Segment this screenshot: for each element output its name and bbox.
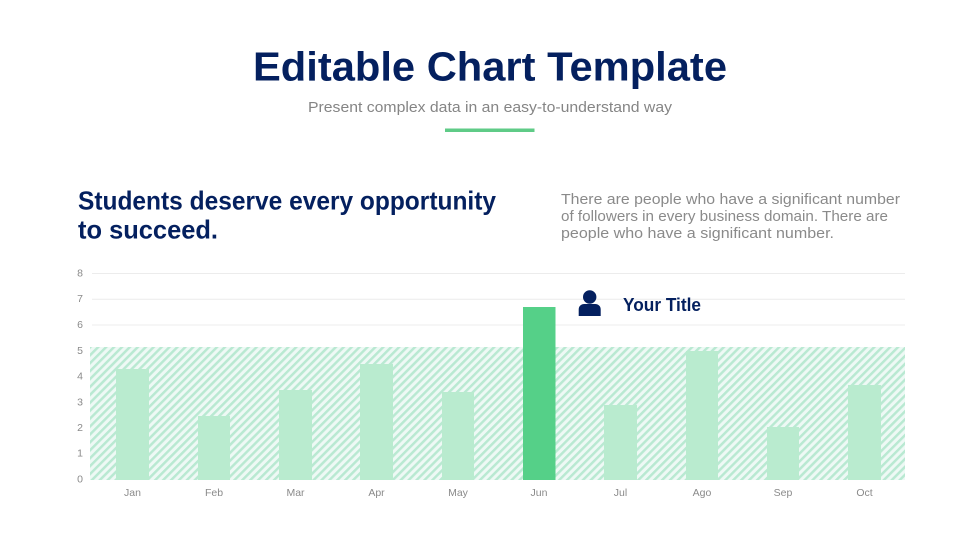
callout title: Your Title bbox=[623, 295, 701, 315]
y axis labels: 4 bbox=[77, 370, 83, 382]
y axis labels: 5 bbox=[77, 345, 83, 357]
description text: people who have a significant number. bbox=[561, 225, 834, 242]
x axis labels: May bbox=[448, 487, 469, 499]
y axis labels bbox=[77, 268, 83, 486]
y axis labels: 0 bbox=[77, 474, 83, 486]
title underline bbox=[445, 128, 534, 132]
y axis labels: 2 bbox=[77, 422, 83, 434]
x axis labels: Sep bbox=[774, 487, 792, 499]
x axis labels: Jun bbox=[531, 487, 548, 499]
icon: person bbox=[579, 290, 601, 316]
x axis labels bbox=[124, 487, 873, 499]
y axis labels: 7 bbox=[77, 293, 83, 305]
y axis labels: 8 bbox=[77, 268, 83, 280]
bars bbox=[116, 351, 881, 480]
description text: of followers in every business domain. There are bbox=[561, 208, 888, 225]
heading: to succeed. bbox=[78, 214, 218, 244]
y axis labels: 1 bbox=[77, 448, 83, 460]
x axis labels: Jan bbox=[124, 487, 141, 499]
gridlines bbox=[92, 274, 905, 325]
bar chart bbox=[77, 268, 905, 499]
subtitle: Present complex data in an easy-to-understand way bbox=[308, 99, 673, 116]
y axis labels: 6 bbox=[77, 319, 83, 331]
description text: There are people who have a significant number bbox=[561, 191, 900, 208]
x axis labels: Apr bbox=[368, 487, 385, 499]
title: Editable Chart Template bbox=[253, 44, 727, 90]
description text bbox=[561, 191, 900, 242]
x axis labels: Mar bbox=[286, 487, 305, 499]
y axis labels: 3 bbox=[77, 396, 83, 408]
hatched band bbox=[90, 347, 905, 480]
x axis labels: Oct bbox=[856, 487, 873, 499]
heading bbox=[78, 186, 497, 244]
heading: Students deserve every opportunity bbox=[78, 186, 497, 216]
x axis labels: Ago bbox=[693, 487, 711, 499]
x axis labels: Feb bbox=[205, 487, 223, 499]
highlighted bar: Jun bbox=[523, 307, 556, 480]
x axis labels: Jul bbox=[614, 487, 627, 499]
